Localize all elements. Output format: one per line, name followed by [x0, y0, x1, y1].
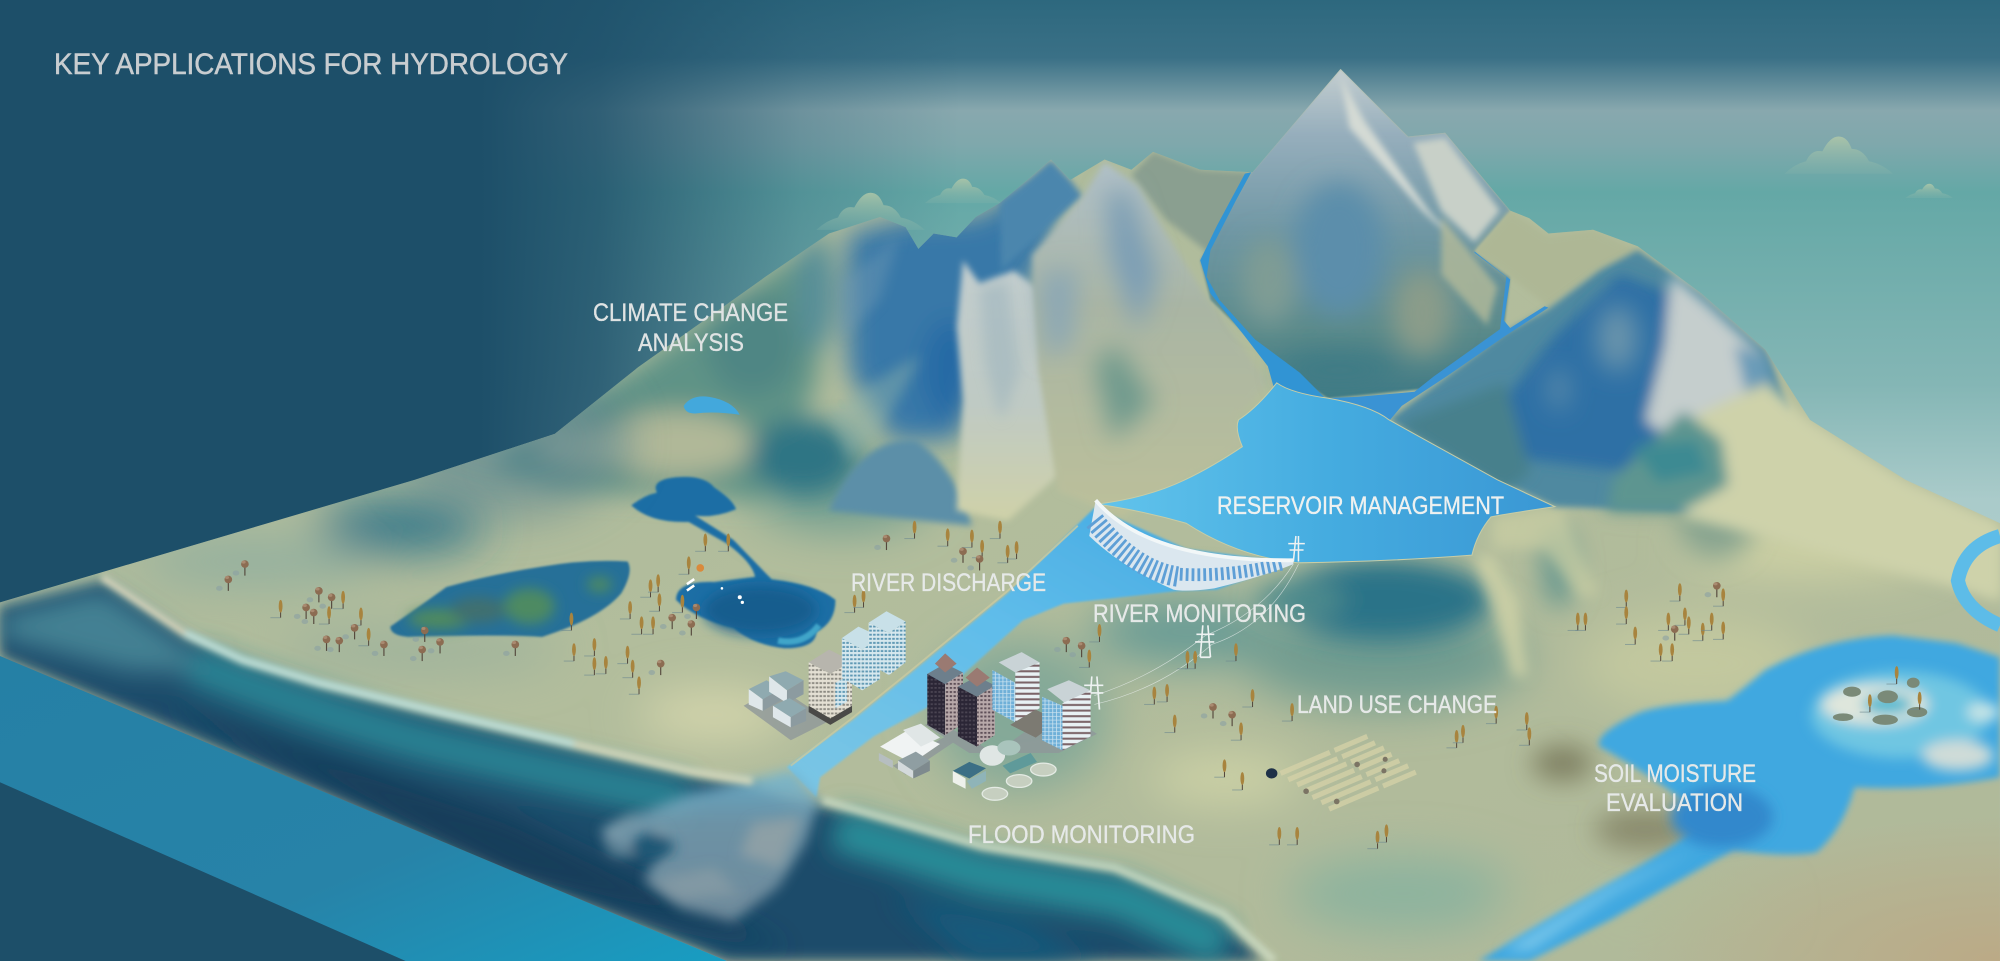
main peak ridge highlights	[1341, 77, 1500, 325]
label: soil moisture evaluation: SOIL MOISTURE	[1594, 760, 1756, 788]
downstream river	[787, 508, 1293, 798]
pale peak shadow	[980, 281, 1020, 421]
island vegetation	[1833, 678, 1927, 725]
shoreline beach line right	[823, 800, 1274, 961]
ocean depth and shallows	[0, 590, 1224, 961]
buildings: houses left	[749, 671, 806, 727]
right ridges	[1471, 508, 1596, 680]
label: soil moisture evaluation: EVALUATION	[1606, 789, 1743, 817]
ocean base	[0, 582, 1263, 961]
reservoir upstream channel right	[1328, 251, 1548, 421]
building: low block	[1010, 710, 1059, 738]
label: climate change analysis: CLIMATE CHANGE	[593, 299, 788, 327]
left green lake	[390, 561, 630, 637]
reservoir upstream channel left	[1200, 172, 1328, 401]
boats	[686, 564, 744, 604]
back blue peaks	[1000, 160, 1083, 271]
foot hill arch	[829, 440, 972, 526]
right lake and floodplain	[1478, 636, 2000, 961]
land shading patches	[140, 453, 1939, 937]
label: river monitoring: RIVER MONITORING	[1093, 600, 1306, 628]
farm field	[1281, 736, 1416, 809]
trees	[216, 521, 1922, 849]
green lake vegetation	[408, 577, 612, 629]
label: land use change: LAND USE CHANGE	[1297, 691, 1497, 719]
ocean	[0, 582, 1263, 961]
lake inner shading and island	[1503, 671, 2000, 951]
dam	[1089, 500, 1293, 591]
title: KEY APPLICATIONS FOR HYDROLOGY	[54, 48, 568, 81]
building: blue tower rear	[869, 611, 906, 675]
power lines and pylons	[1084, 536, 1305, 710]
water treatment tanks	[980, 740, 1056, 800]
soil moisture patches	[1532, 745, 1696, 850]
right mountain shading	[1398, 274, 2000, 600]
buildings: small white houses	[879, 724, 940, 778]
clouds	[816, 137, 1953, 230]
left dark lake with channel	[631, 477, 835, 648]
right olive mound	[1473, 210, 1510, 279]
pavements	[744, 687, 1097, 775]
right mountain soft highlights	[1551, 305, 1638, 410]
small upper lake	[684, 396, 740, 415]
building: glass office two	[1042, 680, 1091, 750]
far foothills and blue peaks	[485, 191, 1059, 500]
tractor	[1266, 768, 1277, 778]
building: dark tower two	[958, 667, 995, 747]
label: flood monitoring: FLOOD MONITORING	[968, 821, 1195, 849]
lake pale rim	[778, 625, 819, 642]
label: river discharge: RIVER DISCHARGE	[851, 569, 1046, 597]
right blue mountain	[1389, 250, 1788, 513]
reservoir water	[1097, 383, 1555, 563]
main peak body shading	[1241, 182, 1453, 391]
bottom right tan corner	[1620, 817, 2000, 961]
building: glass office one	[992, 652, 1040, 722]
building: blue tower	[842, 627, 880, 690]
river sediment plume	[599, 770, 819, 921]
river bank highlights	[791, 526, 1078, 766]
lake dark centre	[704, 586, 816, 634]
building: dark tower one	[927, 653, 963, 735]
barn	[953, 762, 986, 789]
label: reservoir management: RESERVOIR MANAGEMENT	[1217, 492, 1504, 520]
label: climate change analysis	[593, 299, 788, 357]
curving river at right edge	[1958, 536, 2000, 625]
shoreline beach line left	[102, 577, 753, 781]
dark teal valley behind the dam	[1256, 482, 1754, 641]
field rocks	[1303, 757, 1388, 804]
slope streaks	[834, 244, 920, 456]
second peak shading	[1040, 191, 1158, 440]
second peak face	[1028, 162, 1209, 512]
olive back ridge	[1131, 152, 1251, 255]
building: beige tower	[809, 650, 852, 725]
label: soil moisture evaluation	[1594, 760, 1756, 817]
left fade over the mountain foot	[395, 364, 625, 517]
big pale peak	[957, 260, 1059, 521]
plume streaks	[609, 817, 801, 900]
panel: front slab edge of ocean	[0, 656, 727, 961]
main peak face	[1200, 69, 1510, 398]
label: climate change analysis: ANALYSIS	[638, 329, 744, 357]
